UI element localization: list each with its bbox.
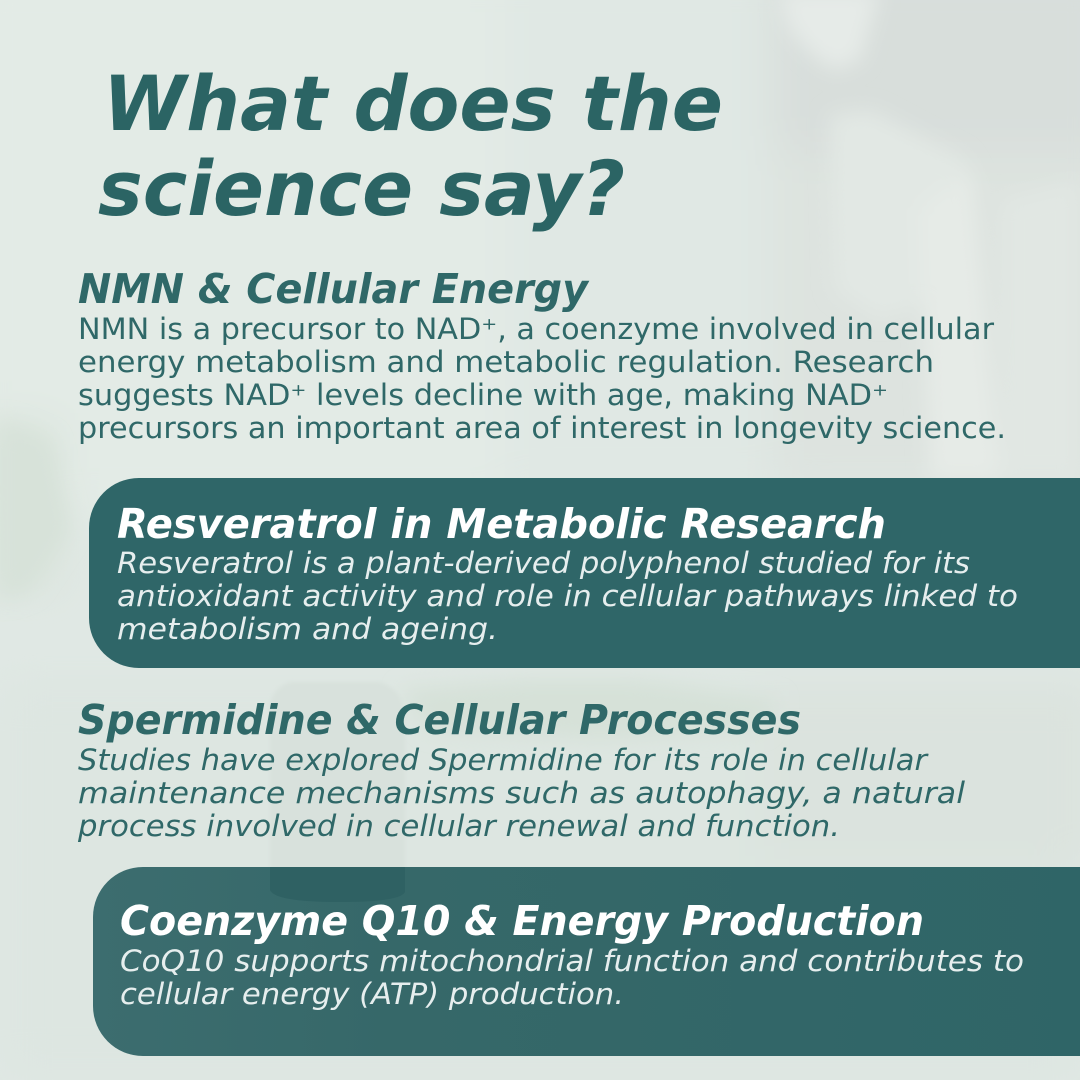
panel: coenzyme Q10: [93, 867, 1080, 1056]
body text: resveratrol: metabolism and ageing.: [117, 612, 498, 646]
body text: spermidine: [77, 743, 966, 843]
heading: Spermidine & Cellular Processes: Spermidine & Cellular Processes: [78, 696, 801, 744]
heading: Coenzyme Q10 & Energy Production: Coenzyme Q10 & Energy Production: [120, 897, 924, 945]
bottle: [269, 682, 405, 880]
panel: resveratrol: [89, 478, 1080, 668]
body text: spermidine: Studies have explored Spermidine for its role in cellular: [78, 743, 929, 777]
title: [98, 59, 723, 233]
body text: CoQ10: cellular energy (ATP) production.: [120, 977, 624, 1011]
body text: NMN: suggests NAD⁺ levels decline with age, making NAD⁺: [78, 378, 888, 412]
section: spermidine: [77, 696, 966, 843]
body text: NMN: NMN is a precursor to NAD⁺, a coenzyme involved in cellular: [78, 312, 995, 346]
heading: NMN & Cellular Energy: NMN & Cellular Energy: [78, 265, 590, 313]
section: NMN and cellular energy: [78, 265, 1006, 445]
body text: NMN: [78, 312, 1006, 445]
body text: CoQ10: [120, 944, 1024, 1011]
heading: Resveratrol in Metabolic Research: Resveratrol in Metabolic Research: [117, 500, 886, 548]
body text: spermidine: maintenance mechanisms such as autophagy, a natural: [78, 776, 966, 810]
body text: resveratrol: [117, 546, 1018, 646]
title: What does the: [103, 59, 723, 148]
body text: NMN: energy metabolism and metabolic regulation. Research: [78, 345, 934, 379]
body text: CoQ10: CoQ10 supports mitochondrial function and contributes to: [120, 944, 1024, 978]
body text: spermidine: process involved in cellular renewal and function.: [77, 809, 840, 843]
body text: resveratrol: Resveratrol is a plant-derived polyphenol studied for its: [117, 546, 970, 580]
body text: resveratrol: antioxidant activity and role in cellular pathways linked to: [117, 579, 1018, 613]
body text: NMN: precursors an important area of interest in longevity science.: [78, 411, 1006, 445]
title: science say?: [98, 144, 625, 233]
